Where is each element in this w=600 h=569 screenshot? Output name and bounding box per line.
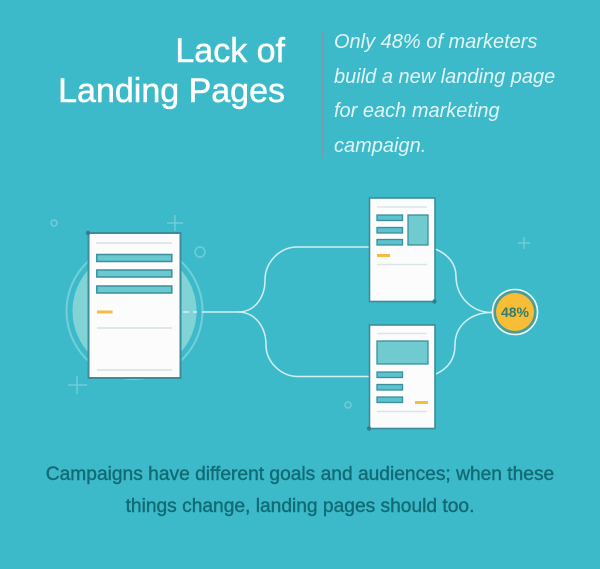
circle behind main page — [66, 243, 202, 379]
48% badge: 48% — [501, 304, 530, 320]
bottom caption — [46, 464, 554, 516]
bottom caption: things change, landing pages should too. — [126, 496, 474, 516]
decorative marks — [51, 215, 530, 408]
statistic text: campaign. — [334, 134, 426, 156]
bottom variant page — [367, 325, 435, 431]
bottom caption: Campaigns have different goals and audiences; when these — [46, 464, 554, 485]
statistic text: build a new landing page — [334, 66, 555, 88]
title — [58, 32, 286, 110]
title: Landing Pages — [58, 72, 285, 110]
connector lines — [183, 247, 492, 376]
top variant page — [370, 198, 437, 304]
divider line — [322, 32, 323, 157]
48% badge — [492, 290, 538, 334]
statistic text: Only 48% of marketers — [334, 31, 537, 53]
title: Lack of — [175, 32, 285, 70]
main landing page — [86, 231, 180, 378]
statistic text: for each marketing — [334, 100, 500, 122]
statistic text — [334, 31, 555, 156]
